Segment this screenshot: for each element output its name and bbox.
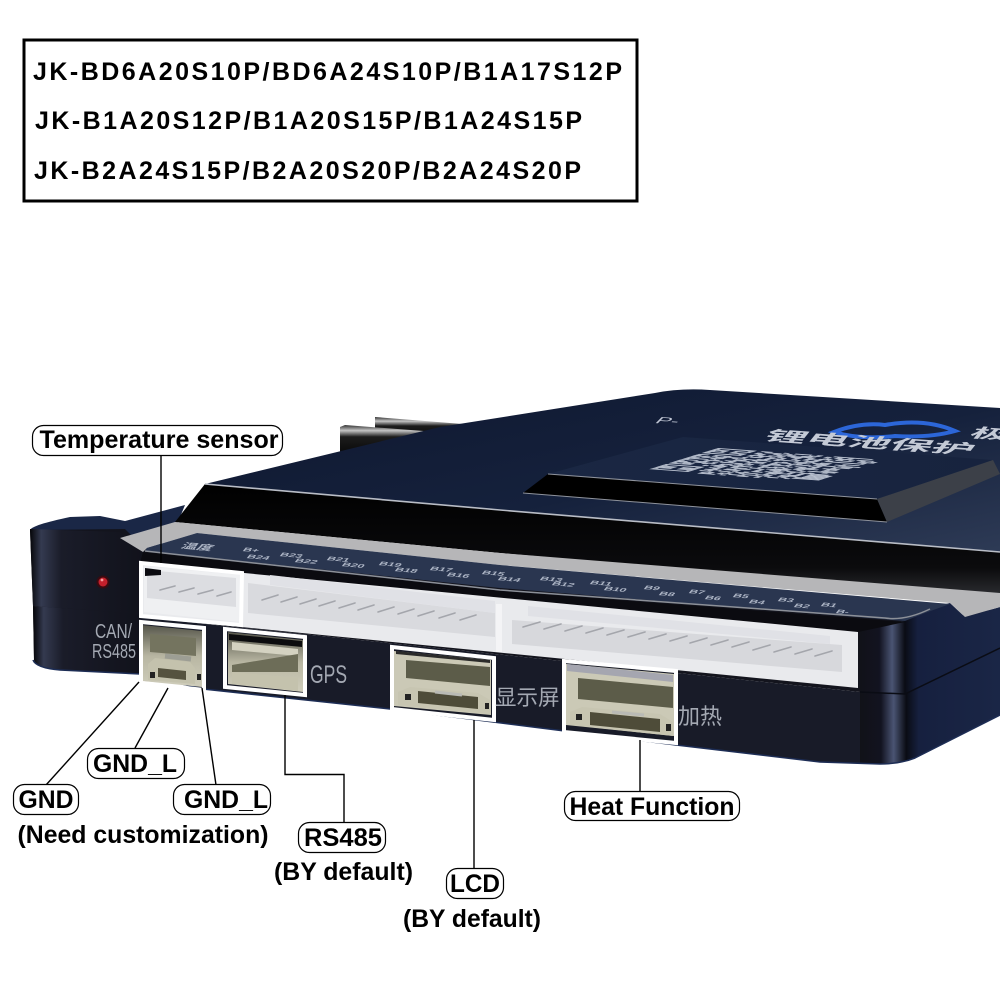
pin label markings: B22 bbox=[293, 558, 320, 566]
callout: temperature sensor bbox=[32, 426, 282, 563]
left corner upper face bbox=[30, 529, 142, 614]
product name marking: 锂电池保护 bbox=[760, 428, 980, 458]
pin label markings: B21 bbox=[325, 556, 352, 564]
red LED bbox=[96, 576, 110, 588]
callout: GND_L lower bbox=[174, 688, 270, 814]
divider highlight bbox=[860, 648, 1000, 694]
CAN/RS485 port bbox=[141, 622, 204, 690]
pin label markings: B18 bbox=[393, 567, 420, 575]
pin label markings: B14 bbox=[496, 576, 523, 584]
BMS device bbox=[30, 389, 1000, 764]
pin label markings: B19 bbox=[377, 561, 404, 569]
silkscreen: CAN/RS485 bbox=[92, 621, 136, 663]
pin label markings: B8 bbox=[657, 591, 678, 598]
lower front face bbox=[33, 606, 1000, 764]
pin label markings: B20 bbox=[340, 562, 366, 570]
pin label markings: B24 bbox=[245, 554, 272, 562]
connector 1 recess bbox=[248, 583, 495, 637]
callout: heat function bbox=[564, 740, 740, 821]
callout: LCD: LCD bbox=[450, 870, 500, 898]
black channel bbox=[140, 552, 905, 632]
pin label markings: B6 bbox=[703, 595, 724, 602]
callout: GND bbox=[14, 682, 139, 814]
temperature connector highlight bbox=[141, 563, 242, 625]
pin label markings: B13 bbox=[538, 576, 565, 584]
grey lip bbox=[120, 522, 1000, 617]
raised plate black edge bbox=[523, 474, 887, 522]
pins: connector 2 bbox=[523, 622, 832, 656]
connector divider bbox=[496, 604, 502, 652]
connector 1 top band bbox=[270, 575, 495, 613]
model list box bbox=[24, 40, 637, 201]
callout: GND_L lower: GND_L bbox=[184, 786, 268, 814]
pin label markings: B3 bbox=[776, 597, 797, 604]
callout: temperature sensor: Temperature sensor bbox=[40, 426, 279, 454]
callout: RS485 bbox=[285, 695, 386, 852]
silkscreen: CAN/RS485: CAN/ bbox=[95, 621, 132, 643]
cloud logo bbox=[834, 423, 955, 437]
note: RS485 by default: (BY default) bbox=[274, 858, 413, 886]
pin label markings: B10 bbox=[602, 586, 628, 594]
lower left tint bbox=[33, 606, 140, 674]
connector 2 top band bbox=[528, 606, 830, 644]
bevel top highlight bbox=[205, 484, 1000, 552]
note: need customization: (Need customization) bbox=[18, 821, 268, 849]
label strip bbox=[145, 533, 950, 621]
callout: GND_L upper: GND_L bbox=[93, 750, 177, 778]
note: LCD by default: (BY default) bbox=[403, 905, 541, 933]
pin label markings: B1 bbox=[819, 602, 840, 609]
pin label markings: B17 bbox=[428, 566, 454, 574]
raised plate edge highlight bbox=[523, 474, 887, 522]
pin label markings: B7 bbox=[687, 589, 707, 596]
pin label markings: 温度 bbox=[179, 541, 217, 552]
pin label markings: B16 bbox=[445, 572, 472, 580]
right corner upper bbox=[858, 603, 1000, 694]
callout: heat function: Heat Function bbox=[570, 793, 734, 821]
GPS port bbox=[225, 629, 305, 695]
pin label markings: B15 bbox=[480, 570, 507, 578]
pin label markings bbox=[179, 541, 851, 616]
callout: LCD bbox=[446, 720, 504, 898]
back terminal posts bbox=[340, 417, 500, 462]
white balance connector bbox=[140, 563, 858, 688]
model line 2: JK-B1A20S12P/B1A20S15P/B1A24S15P bbox=[35, 107, 582, 135]
raised plate grey bevel bbox=[877, 460, 1000, 522]
P- marking: P- bbox=[652, 415, 684, 427]
pins: connector 1 bbox=[262, 595, 476, 620]
black bevel bbox=[175, 484, 1000, 596]
heat port bbox=[564, 661, 676, 743]
right corner lower bbox=[860, 648, 1000, 764]
silkscreen: heating: 加热 bbox=[678, 704, 722, 729]
bottom blue rim bbox=[33, 660, 1000, 764]
raised plate top bbox=[548, 437, 993, 499]
pin label markings: B+ bbox=[241, 547, 262, 554]
silkscreen: display: 显示屏 bbox=[495, 686, 560, 710]
strip edge lines bbox=[145, 551, 930, 619]
pin label markings: B23 bbox=[278, 552, 305, 560]
upper front face bbox=[30, 529, 1000, 694]
QR code bbox=[648, 448, 884, 482]
model line 3: JK-B2A24S15P/B2A20S20P/B2A24S20P bbox=[34, 157, 581, 185]
pin label markings: B5 bbox=[731, 593, 752, 600]
callout: GND_L upper bbox=[88, 688, 184, 778]
top surface bbox=[205, 389, 1000, 560]
LCD port bbox=[392, 647, 494, 720]
pin label markings: B- bbox=[834, 609, 851, 616]
connector 2 recess bbox=[512, 620, 842, 672]
pin label markings: B11 bbox=[588, 580, 615, 588]
pin label markings: B9 bbox=[642, 585, 663, 592]
callout: GND: GND bbox=[18, 786, 74, 814]
callout: RS485: RS485 bbox=[304, 824, 382, 852]
pin label markings: B2 bbox=[792, 603, 813, 610]
model line 1: JK-BD6A20S10P/BD6A24S10P/B1A17S12P bbox=[33, 58, 622, 86]
left corner top bbox=[30, 505, 185, 550]
pin label markings: B12 bbox=[550, 581, 577, 589]
silkscreen: GPS: GPS bbox=[310, 661, 347, 689]
silkscreen: CAN/RS485: RS485 bbox=[92, 641, 136, 663]
pin label markings: B4 bbox=[747, 599, 768, 606]
